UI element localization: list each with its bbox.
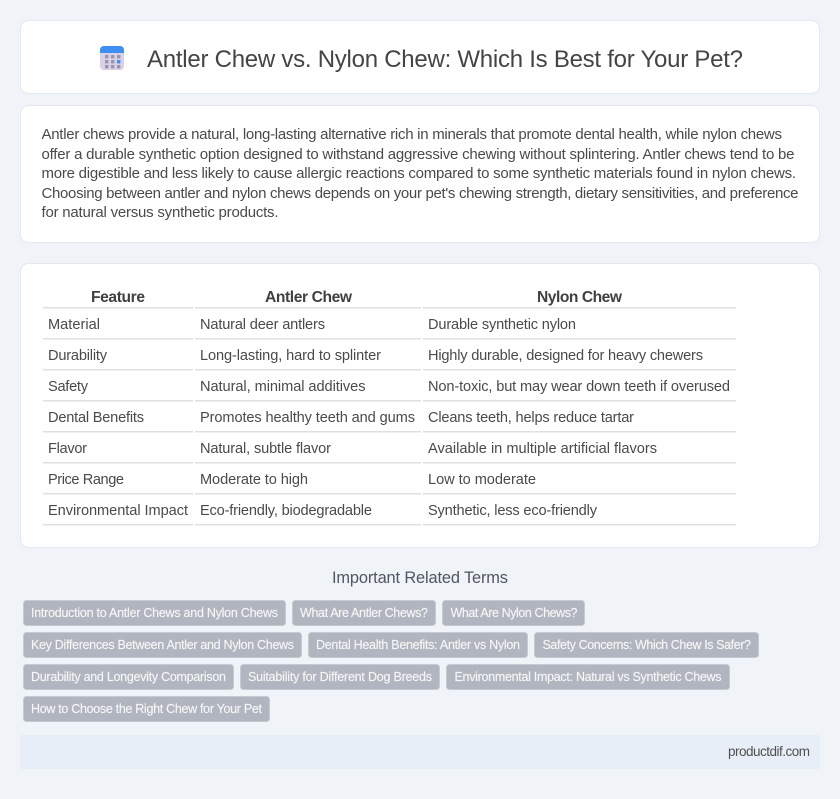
- tag: [240, 664, 440, 690]
- tag: Introduction to Antler Chews and Nylon Chews: [31, 606, 278, 620]
- table header row: [43, 289, 736, 308]
- row: price range: Low to moderate: [428, 472, 536, 488]
- row: flavor: Available in multiple artificial flavors: [428, 441, 657, 457]
- icon: calendar: [100, 46, 124, 70]
- row: flavor: Natural, subtle flavor: [200, 441, 331, 457]
- title: Antler Chew vs. Nylon Chew: Which Is Best for Your Pet?: [147, 46, 743, 73]
- panel: summary paragraph: [20, 106, 820, 242]
- row: dental benefits: Promotes healthy teeth and gums: [200, 410, 415, 426]
- row: material: Durable synthetic nylon: [428, 317, 576, 333]
- row: material: [43, 317, 736, 340]
- row: flavor: Flavor: [48, 441, 87, 457]
- paragraph text: [42, 126, 798, 221]
- tag: [24, 632, 302, 658]
- tag: Suitability for Different Dog Breeds: [248, 670, 432, 684]
- row: environmental impact: Environmental Impact: [48, 503, 188, 519]
- related terms heading: Important Related Terms: [332, 569, 508, 587]
- row: flavor: [43, 441, 736, 464]
- tag: Dental Health Benefits: Antler vs Nylon: [316, 638, 520, 652]
- row: safety: Non-toxic, but may wear down teeth if overused: [428, 379, 730, 395]
- table header row: Antler Chew: [265, 289, 353, 306]
- row: dental benefits: [43, 410, 736, 432]
- row: durability: Durability: [48, 348, 108, 364]
- row: durability: [43, 348, 736, 370]
- paragraph text: offer a durable synthetic option designed to withstand aggressive chewing without splintering. Antler chews tend to be: [42, 146, 794, 163]
- footer: [20, 735, 820, 769]
- tag: [24, 600, 286, 626]
- tag: [24, 696, 270, 722]
- paragraph text: Choosing between antler and nylon chews depends on your pet's chewing strength, dietary sensitivities, and preference: [42, 185, 798, 202]
- tag: Safety Concerns: Which Chew Is Safer?: [542, 638, 751, 652]
- tag: Environmental Impact: Natural vs Synthetic Chews: [454, 670, 722, 684]
- row: safety: Safety: [48, 379, 89, 395]
- row: material: Material: [48, 317, 100, 333]
- tag: [442, 600, 584, 626]
- tag: [446, 664, 730, 690]
- panel: comparison table: [20, 264, 820, 548]
- table header row: Feature: [91, 289, 145, 306]
- tag: [292, 600, 436, 626]
- tag: What Are Nylon Chews?: [450, 606, 578, 620]
- paragraph text: more digestible and less likely to cause allergic reactions compared to some synthetic materials found in nylon chews.: [42, 165, 796, 182]
- tag: Durability and Longevity Comparison: [31, 670, 226, 684]
- paragraph text: Antler chews provide a natural, long-lasting alternative rich in minerals that promote dental health, while nylon chews: [42, 126, 782, 143]
- row: dental benefits: Cleans teeth, helps reduce tartar: [428, 410, 634, 426]
- related terms tags: [24, 600, 758, 722]
- row: durability: Highly durable, designed for heavy chewers: [428, 348, 703, 364]
- row: price range: Price Range: [48, 472, 124, 488]
- tag: What Are Antler Chews?: [300, 606, 428, 620]
- tag: How to Choose the Right Chew for Your Pet: [31, 702, 263, 716]
- row: safety: [43, 379, 736, 402]
- tag: [534, 632, 758, 658]
- tag: Key Differences Between Antler and Nylon Chews: [31, 638, 294, 652]
- tag: [308, 632, 528, 658]
- table header row: Nylon Chew: [537, 289, 623, 306]
- row: price range: Moderate to high: [200, 472, 308, 488]
- header panel: [20, 20, 820, 94]
- tag: [24, 664, 234, 690]
- row: environmental impact: Synthetic, less eco-friendly: [428, 503, 598, 519]
- paragraph text: for natural versus synthetic products.: [42, 204, 278, 221]
- row: material: Natural deer antlers: [200, 317, 325, 333]
- row: safety: Natural, minimal additives: [200, 379, 366, 395]
- footer source text: productdif.com: [728, 744, 810, 759]
- row: dental benefits: Dental Benefits: [48, 410, 144, 426]
- row: durability: Long-lasting, hard to splinter: [200, 348, 381, 364]
- row: environmental impact: Eco-friendly, biodegradable: [200, 503, 372, 519]
- row: environmental impact: [43, 503, 736, 526]
- row: price range: [43, 472, 736, 494]
